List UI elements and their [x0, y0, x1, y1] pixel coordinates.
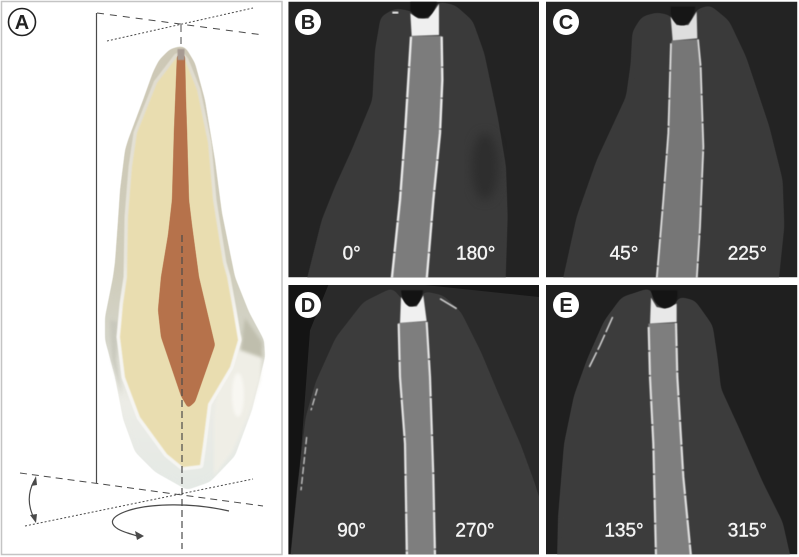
label B: B [301, 12, 315, 34]
panel C: micro-CT 45 and 225 degrees [546, 2, 797, 300]
label C: C [559, 12, 573, 34]
panel E: micro-CT 135 and 315 degrees: 135° [604, 520, 644, 541]
panel B: micro-CT 0 and 180 degrees: 180° [456, 243, 495, 264]
panel D: micro-CT 90 and 270 degrees: 270° [455, 520, 495, 541]
filling [671, 12, 697, 41]
filling [400, 295, 427, 323]
reference axes and rotation arrows [20, 8, 263, 549]
panel C: micro-CT 45 and 225 degrees: 45° [610, 243, 638, 264]
label D [295, 292, 321, 318]
panel D: micro-CT 90 and 270 degrees [288, 285, 543, 557]
label E [553, 292, 579, 318]
canal [392, 36, 442, 280]
panel E: micro-CT 135 and 315 degrees [546, 285, 797, 557]
dentin [120, 55, 238, 467]
canal [648, 323, 692, 557]
panel E: micro-CT 135 and 315 degrees: 315° [728, 520, 767, 541]
label B [295, 9, 321, 35]
canal [656, 39, 703, 280]
canal [398, 321, 436, 557]
panel B: micro-CT 0 and 180 degrees: 0° [343, 243, 361, 264]
panel C: micro-CT 45 and 225 degrees: 225° [728, 243, 767, 264]
label A [8, 8, 36, 36]
label A: A [15, 12, 29, 34]
arrowheads [30, 476, 144, 540]
label C [553, 9, 579, 35]
panel B: micro-CT 0 and 180 degrees [288, 2, 539, 300]
panel A: tooth diagram [2, 2, 282, 554]
filling [650, 298, 677, 324]
pulp canal [158, 55, 215, 408]
label D: D [301, 295, 315, 317]
panel D: micro-CT 90 and 270 degrees: 90° [337, 520, 366, 541]
label E: E [559, 295, 573, 317]
tooth illustration [105, 46, 265, 490]
filling [410, 4, 439, 36]
